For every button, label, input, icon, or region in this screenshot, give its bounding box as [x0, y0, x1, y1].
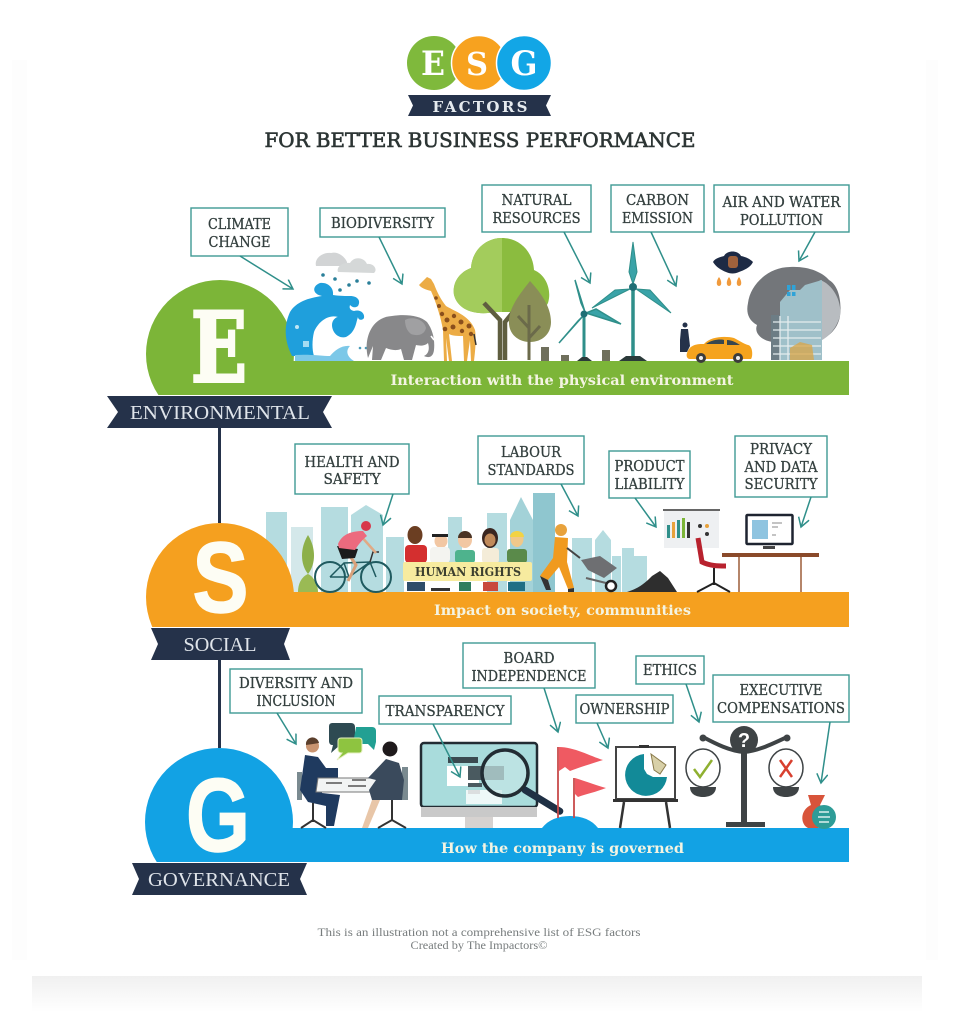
- callout: transparency: TRANSPARENCY: [386, 704, 505, 720]
- circle and bar: [146, 523, 849, 627]
- icon: dark rain cloud: [713, 252, 753, 286]
- callout: board independence: INDEPENDENCE: [472, 669, 586, 685]
- bar caption: Interaction with the physical environment: [390, 373, 734, 389]
- callout: climate change: [191, 208, 293, 289]
- callout: biodiversity: BIODIVERSITY: [331, 216, 434, 232]
- icon: smoke and polluting building: [747, 267, 841, 360]
- icon: coal pile: [627, 571, 677, 592]
- icon: small cypress tree: [298, 535, 318, 592]
- letter E: E: [191, 292, 247, 404]
- callout: product liability: LIABILITY: [614, 477, 685, 493]
- panel: social: [146, 436, 849, 671]
- callout: executive compensations: EXECUTIVE: [740, 683, 822, 699]
- callout: climate change: CHANGE: [208, 235, 270, 251]
- callout: diversity and inclusion: [230, 669, 362, 744]
- icon: cyclist: [315, 521, 391, 592]
- letter S: S: [192, 522, 248, 634]
- bar caption: Impact on society, communities: [434, 603, 691, 619]
- banner: environmental: [107, 396, 332, 428]
- logo: ESG factors: G: [510, 44, 538, 84]
- callout: health and safety: [295, 444, 409, 525]
- icon: presentation board: [663, 509, 720, 548]
- callout: climate change: CLIMATE: [208, 217, 271, 233]
- banner: governance: [132, 863, 307, 895]
- icon: wind turbines: [559, 242, 671, 361]
- logo: ESG factors: E: [421, 44, 445, 84]
- icon: wave and rain: [286, 253, 376, 361]
- icon: easel with pie chart: [613, 745, 678, 828]
- circle and bar: [145, 740, 849, 862]
- callout: ownership: [576, 695, 673, 748]
- logo: ESG factors: FACTORS: [432, 98, 528, 116]
- callout: product liability: PRODUCT: [614, 459, 685, 475]
- callout: privacy and data security: AND DATA: [744, 460, 818, 476]
- icon: trees: [454, 238, 610, 361]
- banner: environmental: ENVIRONMENTAL: [130, 402, 310, 424]
- icon: people with human rights banner: HUMAN RIGHTS: [415, 564, 521, 579]
- icon: computer and magnifier: [421, 743, 563, 828]
- footer note: Created by The Impactors©: [410, 938, 548, 952]
- callout: privacy and data security: SECURITY: [744, 477, 818, 493]
- callout: transparency: [379, 696, 511, 777]
- title: FOR BETTER BUSINESS PERFORMANCE: [264, 128, 696, 152]
- banner: social: SOCIAL: [184, 634, 256, 656]
- circle and bar: [146, 280, 849, 428]
- callout: air and water pollution: AIR AND WATER: [722, 195, 842, 211]
- icon: money bag: [802, 795, 836, 829]
- callout: carbon emission: [611, 185, 704, 286]
- connector line: [218, 428, 221, 748]
- callout: carbon emission: CARBON: [626, 193, 689, 209]
- callout: natural resources: [482, 185, 591, 283]
- callout: executive compensations: [713, 675, 849, 783]
- icon: balance scale: ?: [738, 730, 750, 752]
- logo: ESG factors: S: [466, 45, 488, 83]
- icon: meeting at a table: [297, 723, 408, 828]
- callout: air and water pollution: POLLUTION: [740, 213, 823, 229]
- icon: car and person: [680, 322, 752, 363]
- callout: ethics: ETHICS: [643, 663, 697, 679]
- icon: desk with monitor: [722, 515, 819, 592]
- callout: natural resources: NATURAL: [502, 193, 572, 209]
- callout: labour standards: STANDARDS: [488, 463, 574, 479]
- callout: labour standards: LABOUR: [501, 445, 562, 461]
- icon: balance scale: [686, 726, 803, 827]
- callout: ownership: OWNERSHIP: [580, 702, 670, 718]
- callout: natural resources: RESOURCES: [492, 211, 580, 227]
- footer note: [318, 925, 641, 952]
- callout: board independence: [463, 643, 595, 732]
- callout: board independence: BOARD: [504, 651, 554, 667]
- callout: carbon emission: EMISSION: [622, 211, 693, 227]
- callout: diversity and inclusion: DIVERSITY AND: [239, 676, 353, 692]
- icon: flags on a mound: [542, 747, 606, 828]
- icon: people with human rights banner: [403, 526, 532, 591]
- panel: environmental: [107, 185, 849, 428]
- callout: air and water pollution: [714, 185, 849, 261]
- banner: governance: GOVERNANCE: [148, 869, 290, 891]
- footer note: This is an illustration not a comprehensive list of ESG factors: [318, 925, 641, 939]
- callout: privacy and data security: PRIVACY: [750, 442, 812, 458]
- logo: ESG factors: [407, 36, 552, 116]
- callout: health and safety: SAFETY: [324, 472, 381, 488]
- callout: privacy and data security: [735, 436, 827, 527]
- callout: labour standards: [478, 436, 584, 516]
- callout: diversity and inclusion: INCLUSION: [256, 694, 336, 710]
- letter G: G: [186, 758, 250, 874]
- banner: social: [151, 628, 290, 660]
- callout: ethics: [636, 656, 704, 722]
- bar caption: How the company is governed: [441, 841, 684, 857]
- callout: biodiversity: [320, 208, 445, 284]
- callout: executive compensations: COMPENSATIONS: [717, 701, 845, 717]
- icon: red office chair: [697, 538, 730, 592]
- icon: elephant: [367, 315, 434, 360]
- icon: worker with wheelbarrow: [540, 524, 617, 592]
- callout: product liability: [609, 451, 690, 527]
- icon: city skyline: [266, 493, 647, 592]
- callout: health and safety: HEALTH AND: [304, 455, 400, 471]
- panel: governance: [132, 643, 849, 896]
- icon: giraffe: [419, 277, 476, 361]
